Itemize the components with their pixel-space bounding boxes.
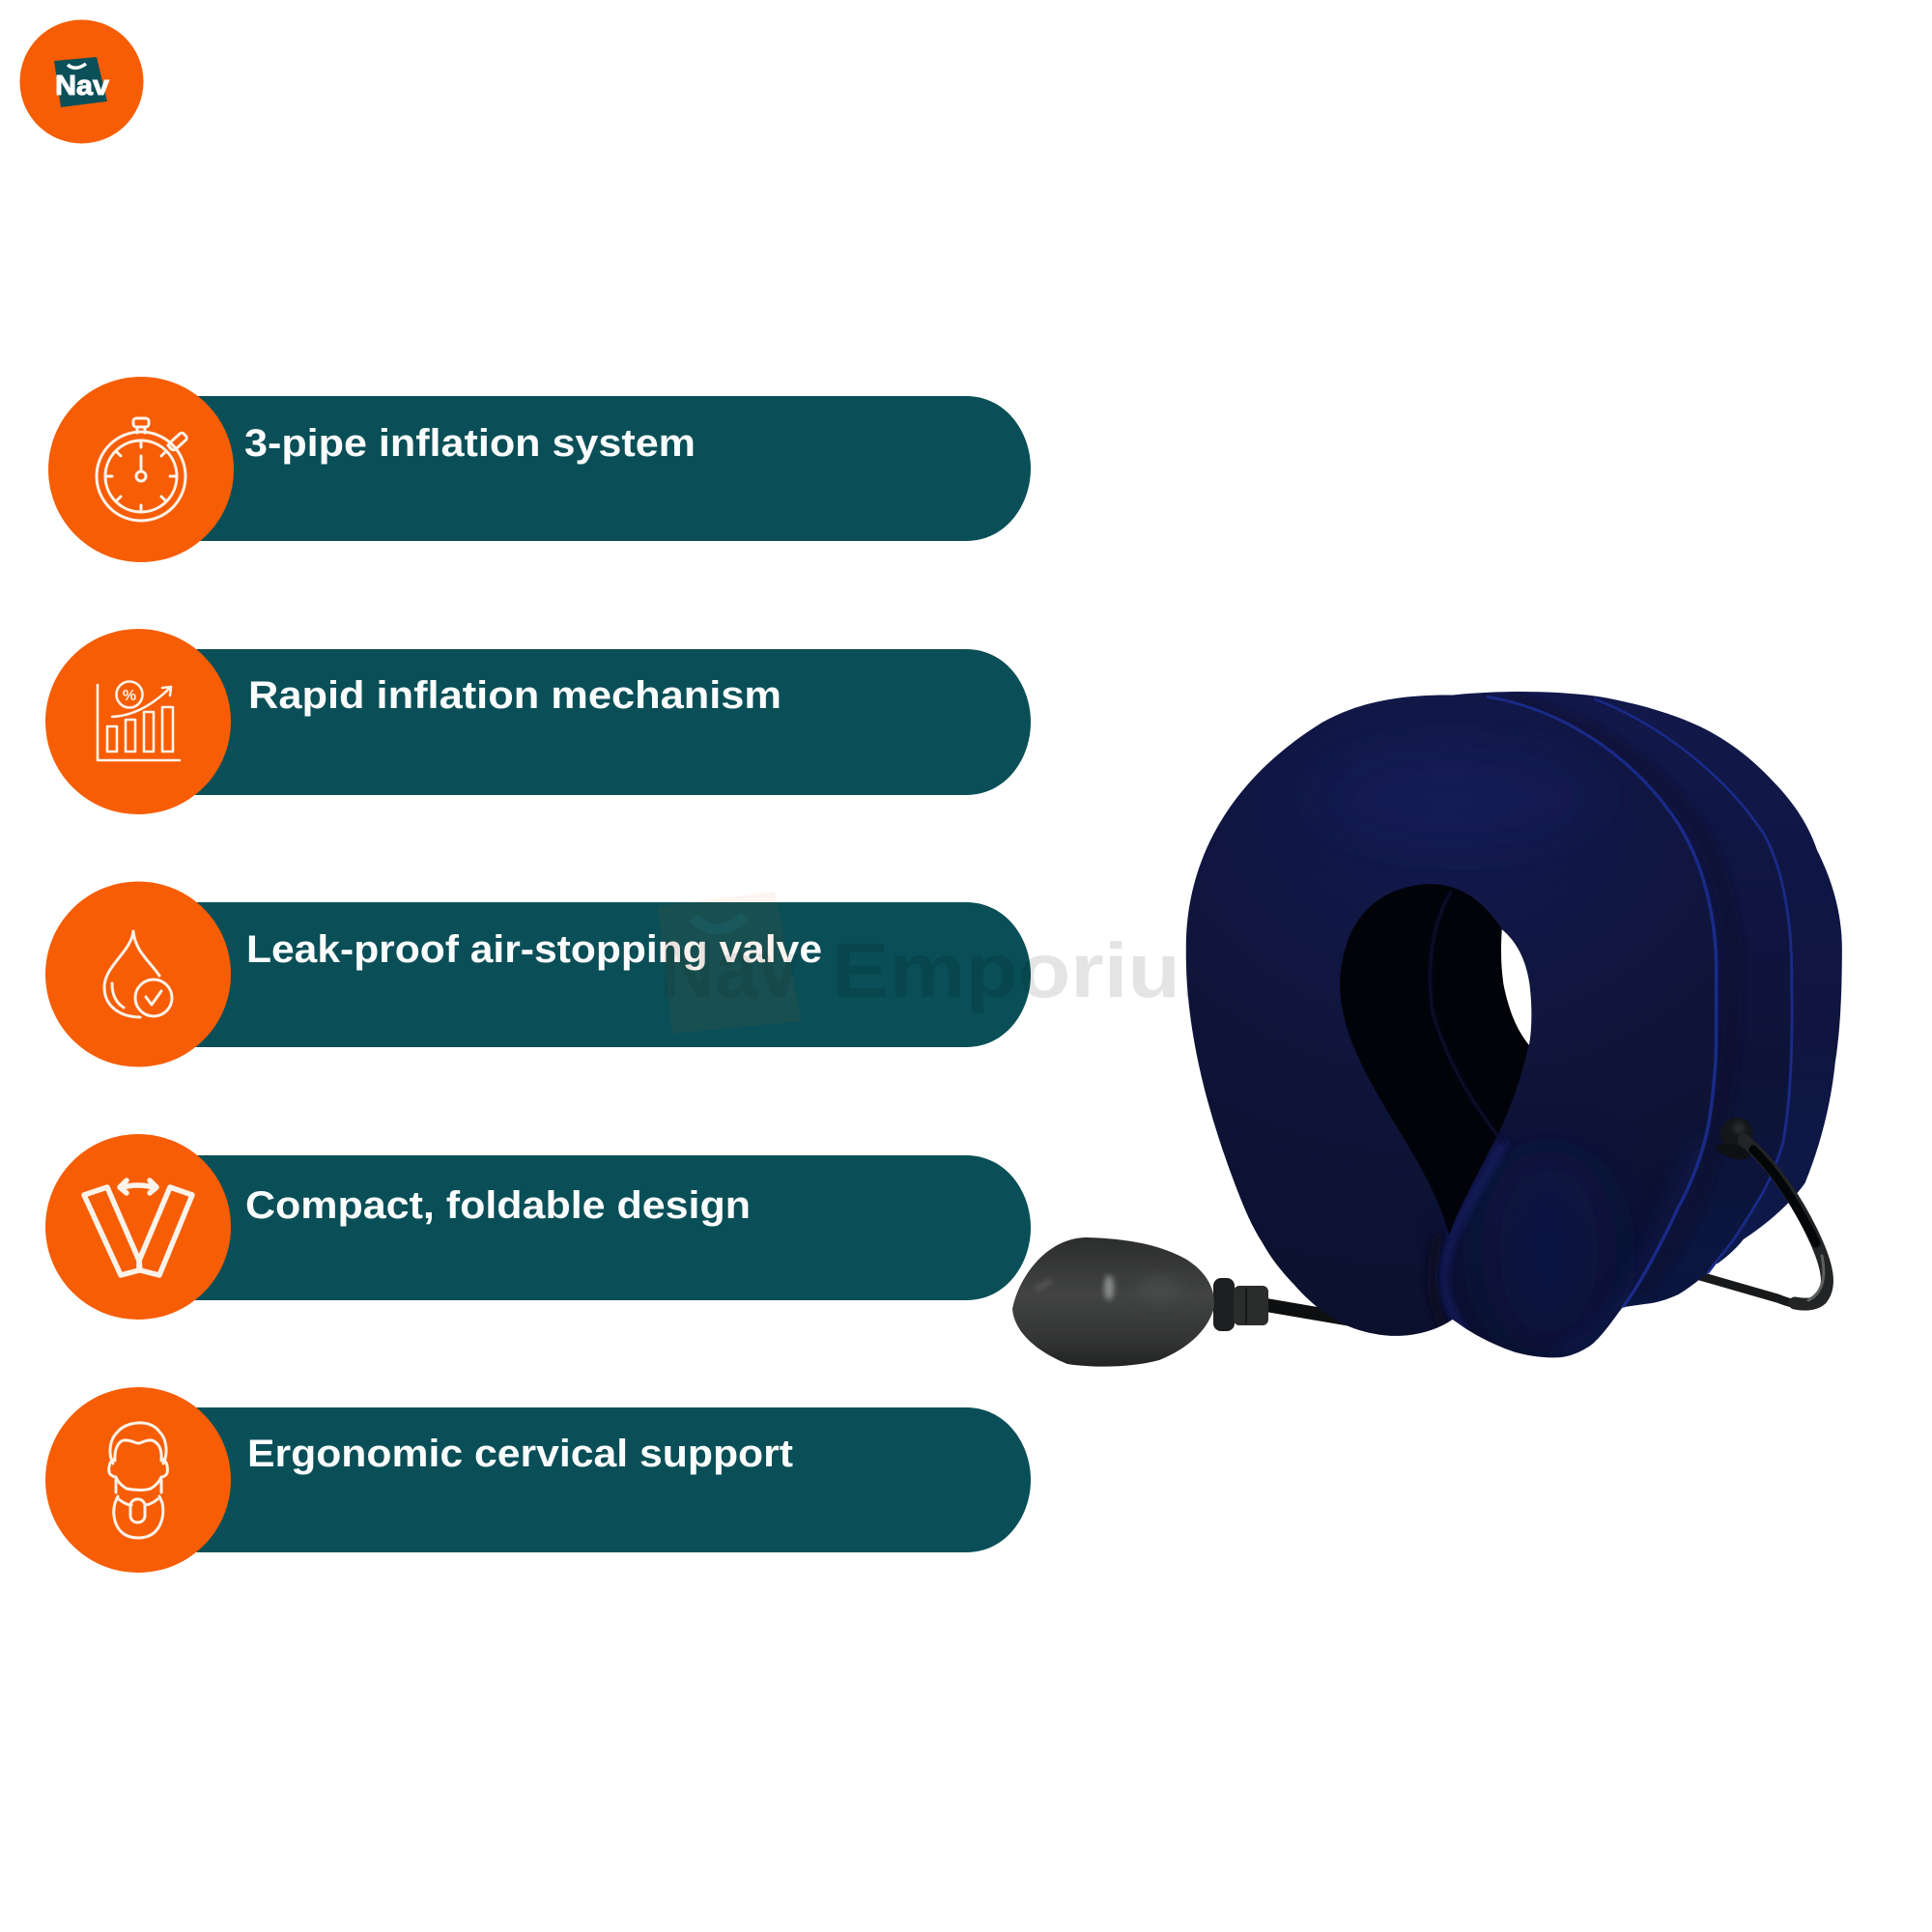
valve [1715,1118,1753,1162]
badge circle 1 [48,377,234,562]
badge circle 3 [45,881,231,1066]
icon: growth chart: % [123,688,136,704]
label 3: Leak-proof air-stopping valve [246,928,822,971]
feature bar 2: Rapid inflation mechanism [45,629,1031,814]
rear pillow layer [1402,692,1842,1265]
label 5: Ergonomic cervical support [247,1433,793,1475]
label 2: Rapid inflation mechanism [248,674,781,717]
brand logo: Nav [55,71,109,101]
pump bulb [1012,1237,1214,1367]
watermark: Nav Emporium: Emporium [832,927,1257,1013]
icon: head with cervical collar [109,1423,167,1538]
feature bar 3: Leak-proof air-stopping valve [45,881,1031,1066]
front pillow layer [1186,696,1717,1357]
label 4: Compact, foldable design [245,1184,751,1227]
pump tube [1261,1304,1362,1321]
label 1: 3-pipe inflation system [244,422,696,465]
pump connector [1213,1278,1268,1331]
centre opening [1340,884,1532,1235]
thin air tube behind pillow [1700,1276,1821,1305]
front seam [1487,696,1717,1307]
product: inflatable neck traction pillow with hand pump [1012,692,1842,1367]
feature bar 1: 3-pipe inflation system [48,377,1031,562]
watermark: Nav Emporium [658,892,1257,1034]
badge circle 2 [45,629,231,814]
icon: growth chart [98,682,180,760]
feature bar 5: Ergonomic cervical support [45,1387,1031,1573]
badge circle 4 [45,1134,231,1320]
brand logo [19,19,143,143]
watermark: Nav Emporium: Nav [660,923,800,1014]
badge circle 5 [45,1387,231,1573]
feature bar 4: Compact, foldable design [45,1134,1031,1320]
see-through gap [1501,929,1531,1045]
curved air tube [1744,1140,1827,1304]
shadow beside front layer [1515,701,1734,1289]
front layer shading [1317,746,1704,1357]
icon: folding panels [84,1180,192,1275]
middle pillow layer [1402,694,1792,1307]
inner layer ridge [1430,891,1503,1144]
seam between rear and middle layers [1594,699,1792,1273]
pillow body [1186,692,1842,1357]
icon: drop with check [104,931,172,1017]
icon: stopwatch [97,418,187,521]
